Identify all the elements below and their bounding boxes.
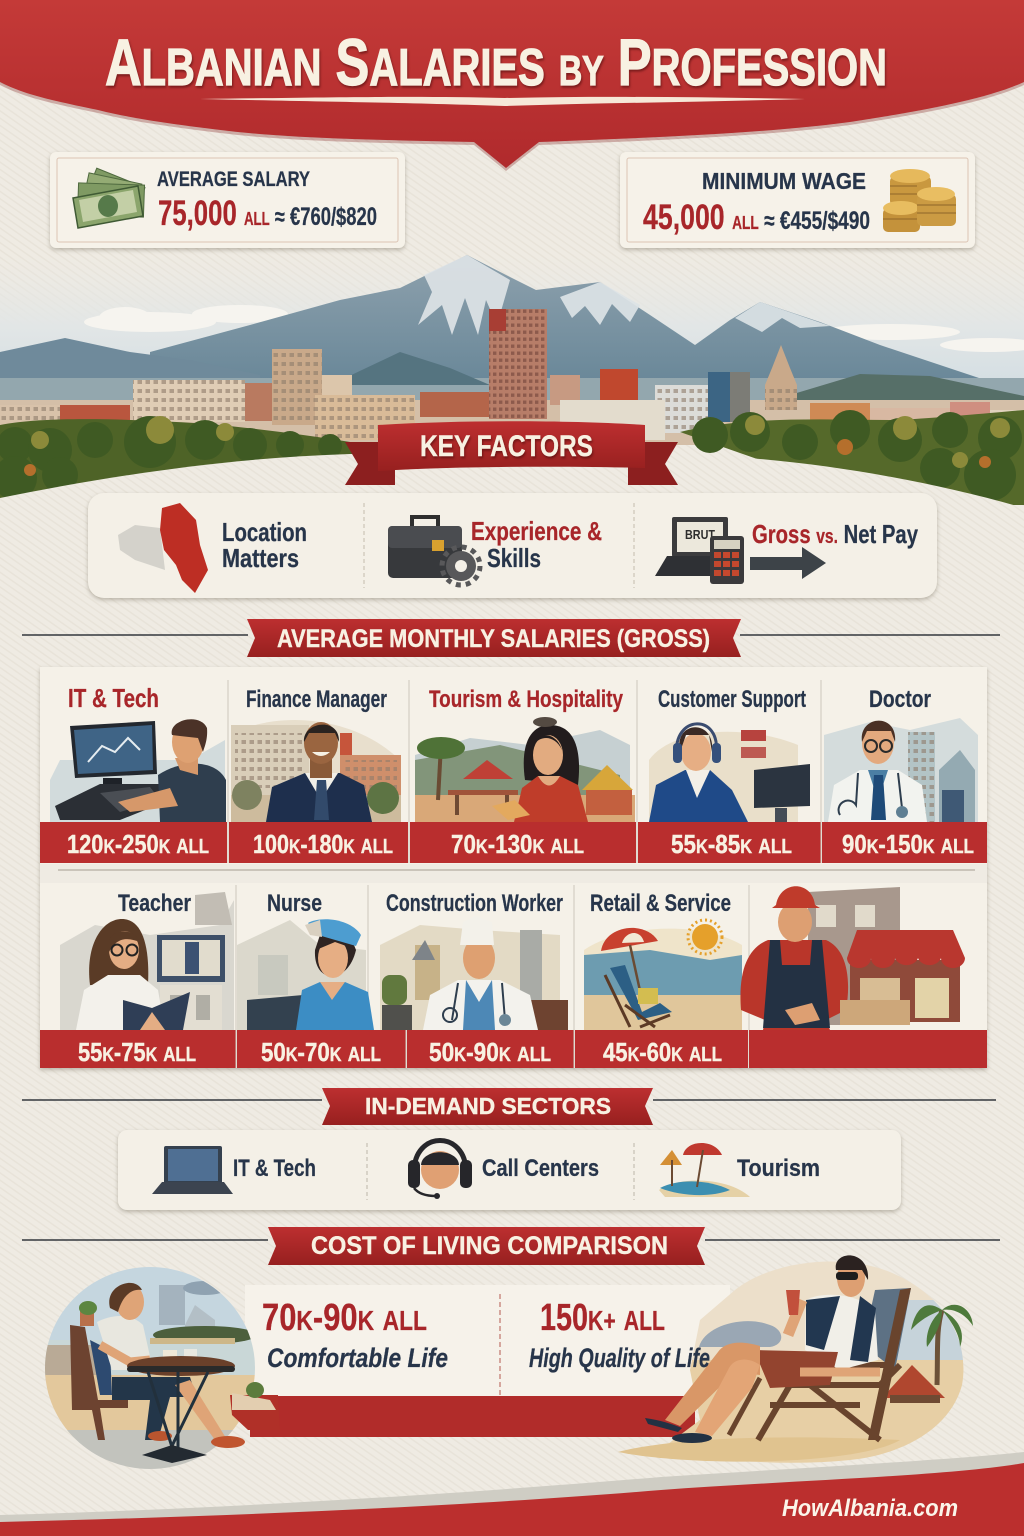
price bar: Customer Support: [638, 822, 821, 863]
text: experience and skills: Experience &: [471, 516, 602, 546]
card: Tourism and Hospitality: [415, 686, 635, 822]
price bar: IT and Tech: [40, 822, 227, 863]
card: Retail and Service: [584, 890, 742, 1030]
price bar: Teacher: [40, 1030, 236, 1068]
illustration: man relaxing in beach chair: [610, 1250, 973, 1470]
label: tourism: Tourism: [737, 1155, 820, 1182]
text: location matters: Matters: [222, 543, 299, 573]
icon: headset: [408, 1140, 472, 1199]
text: location matters: [222, 517, 307, 573]
heading: key factors: KEY FACTORS: [420, 430, 593, 463]
clouds: [84, 305, 1024, 352]
price bar: Construction Worker: 50K-90K ALL: [429, 1037, 551, 1067]
footer banner: [0, 1452, 1024, 1536]
section heading: average monthly salaries: AVERAGE MONTHLY SALARIES (GROSS): [277, 625, 710, 653]
ribbon: key factors: [345, 421, 678, 485]
card: Teacher: Teacher: [118, 890, 191, 917]
panorama: mountains and city: [0, 255, 1024, 510]
mountain range: [0, 255, 1024, 413]
panel: cost of living background: [245, 1285, 730, 1437]
section heading: in-demand sectors: IN-DEMAND SECTORS: [365, 1093, 611, 1119]
panel: in-demand sectors: [118, 1130, 901, 1210]
text: gross vs. net pay: Gross vs. Net Pay: [752, 519, 918, 549]
card: Retail and Service: Retail & Service: [590, 890, 731, 917]
label: IT and Tech: IT & Tech: [233, 1155, 316, 1182]
card: Finance Manager: Finance Manager: [246, 686, 387, 713]
section heading: average monthly salaries: [22, 619, 1000, 657]
trees: [0, 410, 1024, 510]
icon: calculator, BRUT screen and arrow: BRUT: [685, 527, 715, 542]
paper curve below panorama: [0, 454, 1024, 560]
section heading: cost of living comparison: [22, 1227, 1000, 1265]
stat card: minimum wage: [620, 152, 975, 248]
label: high quality of life: High Quality of Life: [529, 1343, 710, 1373]
illustration: man at cafe table: [40, 1260, 280, 1475]
card: Nurse: [237, 890, 374, 1030]
footer website: HowAlbania.com: [782, 1495, 958, 1522]
price bar: IT and Tech: 120K-250K ALL: [67, 829, 209, 859]
value: minimum wage: 45,000 ALL ≈ €455/$490: [643, 198, 870, 237]
panel: key factors: [88, 493, 937, 598]
card: Tourism and Hospitality: Tourism & Hospitality: [429, 686, 624, 713]
panel: salary cards: [40, 667, 987, 1068]
icon: briefcase and gear: [388, 517, 480, 585]
card: Nurse: Nurse: [267, 890, 322, 917]
card: Finance Manager: [231, 686, 401, 822]
value: high quality: 150K+ ALL: [540, 1297, 665, 1339]
label: minimum wage: MINIMUM WAGE: [702, 168, 866, 194]
stat card: average salary: [50, 152, 405, 248]
label: comfortable life: Comfortable Life: [267, 1343, 448, 1373]
icon: calculator, BRUT screen and arrow: [655, 517, 826, 584]
price bar: Doctor: 90K-150K ALL: [842, 829, 974, 859]
icon: laptop: [152, 1146, 233, 1194]
card: Doctor: Doctor: [869, 686, 931, 713]
icon: banknotes: [73, 168, 145, 228]
card: Customer Support: Customer Support: [658, 686, 806, 713]
card: worker and market stall: [740, 886, 965, 1030]
price bar: Tourism and Hospitality: 70K-130K ALL: [451, 829, 584, 859]
text: experience and skills: [471, 516, 602, 573]
icon: beach umbrella: [659, 1143, 750, 1197]
price bar: Finance Manager: [229, 822, 408, 863]
card: Construction Worker: Construction Worker: [386, 890, 563, 917]
header banner: [0, 0, 1024, 171]
price bar: Nurse: 50K-70K ALL: [261, 1037, 381, 1067]
price bar: empty: [749, 1030, 987, 1068]
label: average salary: AVERAGE SALARY: [157, 168, 310, 191]
card: IT and Tech: [50, 683, 226, 822]
card: IT and Tech: IT & Tech: [68, 683, 159, 713]
value: comfortable: 70K-90K ALL: [262, 1297, 427, 1339]
label: call centers: Call Centers: [482, 1155, 599, 1182]
title: ALBANIAN SALARIES BY PROFESSION: [105, 25, 887, 99]
section heading: in-demand sectors: [22, 1088, 996, 1125]
card: Doctor: [824, 686, 978, 822]
price bar: Doctor: [822, 822, 987, 863]
icon: gold coins: [883, 169, 956, 232]
price bar: Finance Manager: 100K-180K ALL: [253, 829, 393, 859]
price bar: Customer Support: 55K-85K ALL: [671, 829, 792, 859]
price bar: Tourism and Hospitality: [410, 822, 636, 863]
card: Construction Worker: [380, 890, 568, 1030]
card: Teacher: [60, 890, 234, 1030]
text: experience and skills: Skills: [487, 543, 541, 573]
section heading: cost of living comparison: COST OF LIVING COMPARISON: [311, 1232, 668, 1260]
city buildings: [0, 309, 1024, 445]
text: location matters: Location: [222, 517, 307, 547]
price bar: Construction Worker: [407, 1030, 574, 1068]
value: average salary: 75,000 ALL ≈ €760/$820: [158, 194, 377, 233]
icon: map of Albania: [118, 503, 208, 593]
price bar: Teacher: 55K-75K ALL: [78, 1037, 196, 1067]
price bar: Retail and Service: 45K-60K ALL: [603, 1037, 722, 1067]
card: Customer Support: [649, 686, 810, 822]
price bar: Retail and Service: [575, 1030, 748, 1068]
text: cost of living figures: [262, 1297, 710, 1373]
price bar: Nurse: [237, 1030, 406, 1068]
